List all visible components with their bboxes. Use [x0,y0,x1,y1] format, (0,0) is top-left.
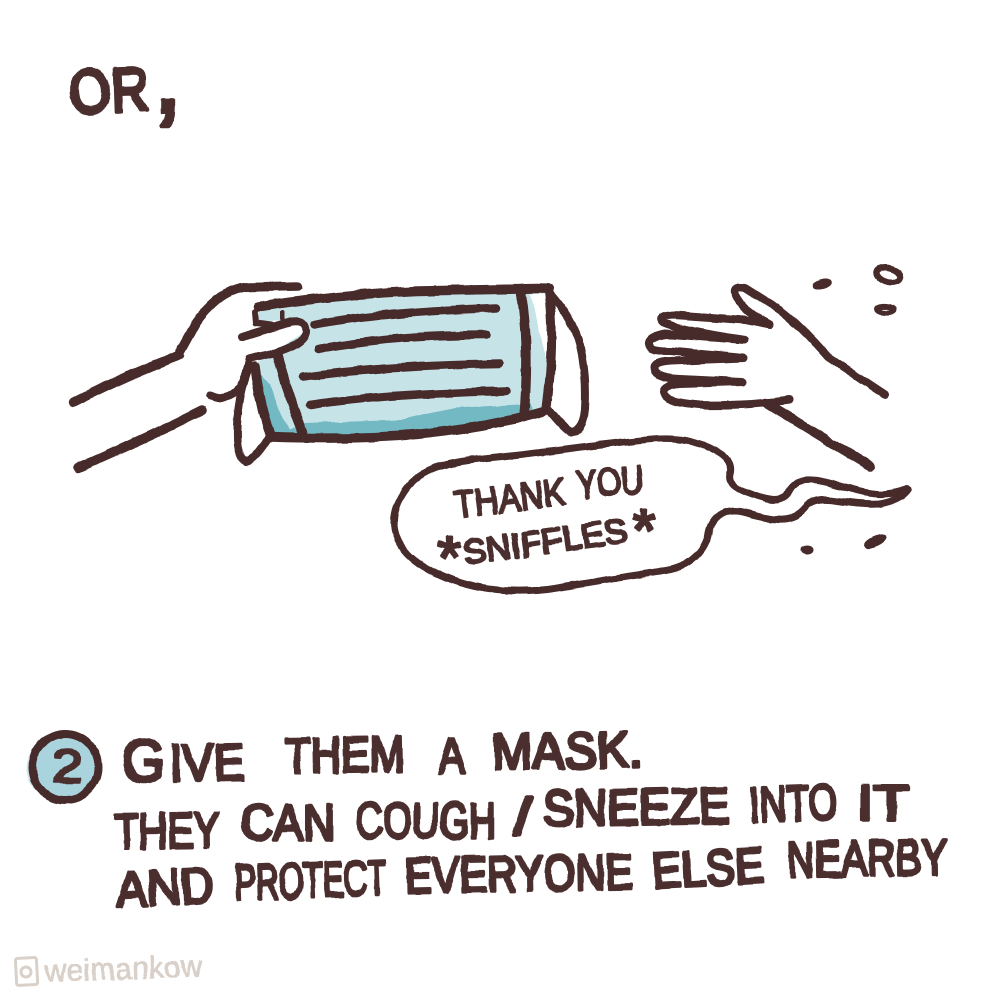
heading: OR, [68,13,183,136]
line 1: THEM [284,726,405,784]
line 2: SNEEZE [542,778,730,837]
mask pleats [303,308,506,405]
line 1: IVE [169,734,245,793]
speech text: * [438,524,461,591]
number badge: 2 [52,740,83,792]
heading: OR,: , [152,13,183,136]
line 3: NEARBY [786,829,948,888]
line 2 [114,774,909,860]
line 2: / [514,789,532,845]
number badge [26,734,98,800]
line 3: EVERYONE [404,844,633,904]
line 2: INTO [748,774,838,833]
line 1 [122,721,643,796]
sweat drops [804,265,902,551]
watermark: instagram icon [15,957,38,986]
line 3 [115,829,948,918]
line 1: A [438,728,466,784]
line 2: IT [857,775,909,831]
line 3: AND [115,857,215,918]
illustration: hand holding mask [74,286,585,468]
line 2: THEY [114,802,220,860]
instruction text [114,721,948,918]
heading: OR,: OR [68,55,150,127]
speech text [438,459,655,591]
holding hand outline [74,286,306,468]
speech text: YOU [574,459,646,507]
speech text: * [632,497,655,564]
illustration: receiving hand [648,287,885,466]
line 1: G [122,727,165,796]
line 2: COUGH [356,793,496,849]
speech text: THANK [452,472,568,527]
speech text: SNIFFLES [461,511,630,573]
speech bubble [394,438,908,591]
watermark: handle: weimankow [43,948,204,989]
mask outline [237,288,585,462]
line 3: PROTECT [233,850,387,911]
line 3: ELSE [651,837,765,899]
line 1: MASK. [491,721,643,780]
mask fabric [254,291,552,437]
line 2: CAN [241,795,335,851]
